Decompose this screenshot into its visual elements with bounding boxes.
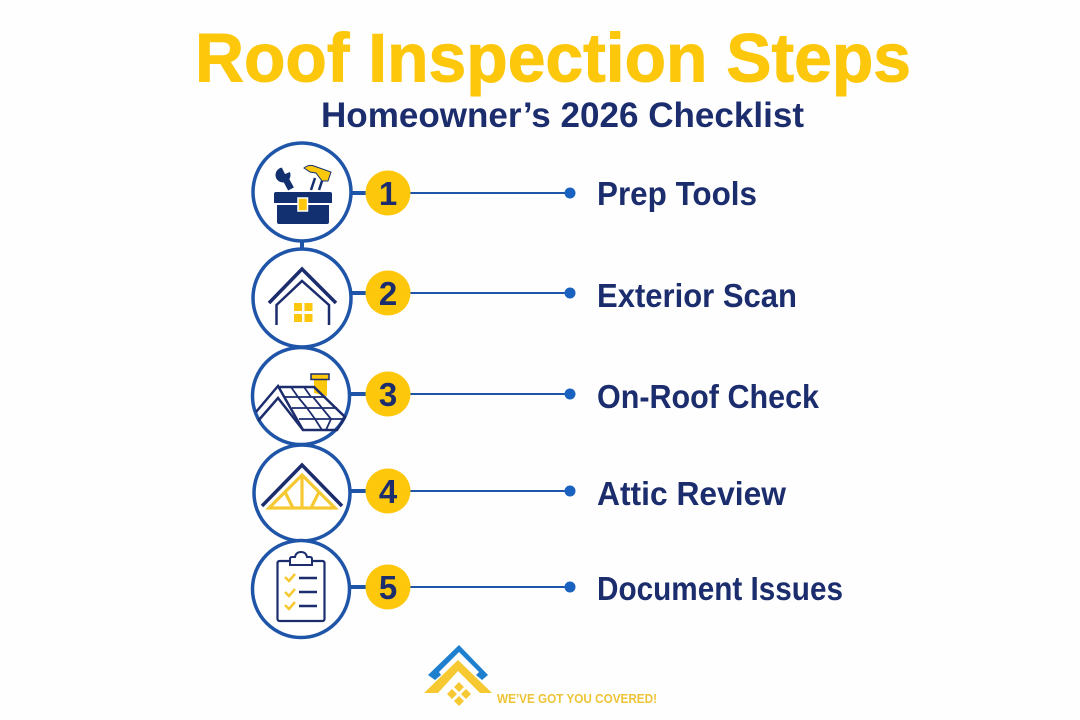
step 4 [254, 445, 787, 541]
step 5 [252, 540, 843, 638]
step 3 [252, 348, 819, 444]
badge 4 [366, 468, 410, 514]
badge 1: 1 [379, 175, 397, 212]
label 2: Exterior Scan [597, 278, 797, 315]
label 1: Prep Tools [597, 176, 757, 213]
label 3: On-Roof Check [597, 379, 819, 416]
icon: toolbox [274, 162, 332, 224]
circle 1 [253, 143, 351, 241]
step 2 [253, 249, 797, 350]
circle 5 [252, 540, 350, 638]
badge 3 [366, 372, 410, 416]
subtitle: Homeowner’s 2026 Checklist [321, 96, 804, 135]
icon: attic truss [262, 465, 342, 508]
label 4: Attic Review [597, 476, 787, 513]
step 1 [253, 143, 757, 250]
badge 5 [366, 564, 410, 610]
badge 2 [366, 270, 410, 316]
icon: shingled roof [256, 374, 345, 430]
icon: house [269, 269, 336, 325]
badge 2: 2 [379, 275, 397, 312]
logo tagline: WE’VE GOT YOU COVERED! [497, 692, 657, 706]
badge 4: 4 [379, 473, 398, 510]
logo roof mark [424, 645, 492, 706]
badge 5: 5 [379, 569, 397, 606]
icon: clipboard checklist [278, 552, 324, 621]
logo [424, 645, 657, 706]
circle 2 [253, 249, 351, 347]
label 5: Document Issues [597, 571, 843, 608]
badge 3: 3 [379, 376, 397, 413]
circle 3 [252, 348, 350, 444]
badge 1 [366, 170, 410, 216]
title: Roof Inspection Steps [195, 20, 911, 96]
circle 4 [254, 445, 350, 541]
